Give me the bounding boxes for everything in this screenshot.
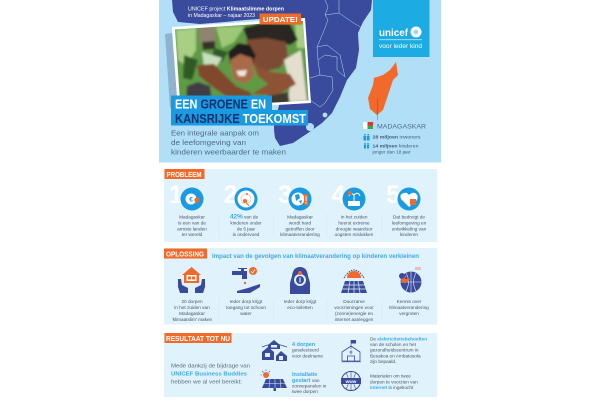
children stat (364, 143, 419, 154)
intro text (171, 364, 250, 386)
problem 2 (224, 181, 262, 237)
solution 2: clean water (226, 267, 266, 316)
problem 5 (386, 181, 427, 237)
solution 4: solar and internet: Duurzame (343, 299, 365, 304)
solution 5: climate knowledge (389, 267, 429, 316)
solution 1: climate-smart villages (172, 267, 213, 322)
solution 2: clean water: water (240, 311, 252, 316)
solution 3: eco toilets (284, 267, 317, 310)
problem 1: € (189, 196, 193, 204)
heading: resultaat: RESULTAAT TOT NU (166, 336, 230, 343)
population stat: 28 miljoen inwoners (372, 135, 420, 140)
panel: oplossing (164, 248, 437, 324)
problem 1 (169, 181, 207, 237)
result: electricity needs: Besakoa en Ambatosola (370, 353, 421, 358)
problem 3: wordt hard (289, 220, 311, 226)
flag of Madagascar (363, 122, 373, 129)
problem 1: armste landen (177, 226, 207, 232)
problem 4: In het zuiden (341, 214, 368, 220)
problem 2: kinderen onder (230, 220, 262, 226)
result: electricity needs: De elektriciteitsbehoeften (370, 337, 427, 342)
problem 3: klimaatverandering (280, 232, 320, 237)
unicef logo: unicef (379, 27, 408, 39)
problem 5: Dat bedreigt de (393, 214, 425, 220)
heading: probleem (164, 169, 204, 179)
subtitle: de leefomgeving van (171, 138, 246, 147)
main title: KANSRIJKE TOEKOMST (175, 111, 306, 126)
heading: oplossing: OPLOSSING (166, 252, 204, 258)
solution 1: climate-smart villages: Madagaskar (179, 311, 205, 316)
main title (171, 96, 308, 126)
solution 4: solar and internet: internet aanleggen (335, 317, 374, 322)
result: internet icon: www (345, 379, 357, 384)
result: electricity needs: van de scholen en het (370, 342, 417, 347)
heading: oplossing (164, 248, 207, 258)
solution 1: climate-smart villages: 'klimaatslim' maken (172, 317, 213, 322)
map of Madagascar (368, 62, 398, 115)
solution 5: climate knowledge: klimaatverandering (389, 305, 429, 310)
problem 2: 2 (224, 181, 237, 209)
subheading: Impact van de gevolgen van klimaatverandering op kinderen verkleinen (212, 253, 419, 260)
intro text: Mede dankzij de bijdrage van (171, 364, 250, 370)
problem 2: de 5 jaar (237, 226, 256, 232)
solution 2: clean water: Ieder dorp krijgt (230, 299, 263, 304)
solution 5: climate knowledge: vergroten (399, 311, 419, 316)
problem 5: leefomgeving en (392, 220, 427, 226)
problem 5: 5 (386, 181, 400, 209)
project title: in Madagaskar – najaar 2023 (188, 13, 255, 19)
problem 2: 42% (230, 214, 243, 220)
result: 4 villages: voor deelname (292, 354, 323, 358)
project title: UNICEF project Klimaatslimme dorpen (188, 6, 284, 12)
solution 3: eco toilets: eco-toiletten (287, 305, 313, 310)
solution 4: solar and internet: (zonne)energie en (335, 311, 373, 316)
problem 4: heerst extreme (338, 220, 370, 226)
problem 3 (278, 181, 320, 237)
solution 5: climate knowledge: Kennis over (397, 299, 422, 304)
result: school icon (342, 340, 361, 362)
result: solar installation (292, 372, 327, 394)
subtitle: Een integrale aanpak om (171, 128, 259, 138)
result: 4 villages: 4 dorpen (292, 342, 316, 348)
photo of children at water tap (172, 18, 311, 106)
problem 4: droogte waardoor (336, 226, 373, 232)
update badge: UPDATE! (263, 15, 298, 24)
solution 4: solar and internet: voorzieningen voor (334, 305, 374, 310)
result: 4 villages: geselecteerd (292, 348, 319, 352)
subtitle (171, 128, 286, 156)
heading: resultaat (164, 333, 232, 343)
solution 4: solar and internet (334, 270, 374, 322)
result: internet icon (341, 372, 361, 390)
result: electricity needs: zijn bepaald. (370, 359, 396, 364)
problem 1: 1 (169, 181, 183, 209)
problem 2: is ondervoed (233, 232, 260, 237)
problem 3: getroffen door (285, 226, 315, 232)
result: solar installation: gestart van (292, 378, 320, 384)
result: internet materials: Materialen om twee (370, 373, 411, 378)
heading: probleem: PROBLEEM (166, 172, 202, 179)
intro text: hebben we al veel bereikt: (171, 380, 242, 386)
problem 3: Madagaskar (287, 214, 313, 220)
subtitle: kinderen weerbaarder te maken (171, 148, 286, 156)
unicef logo (373, 0, 430, 57)
problem 5: ontwikkeling van (392, 226, 427, 232)
intro text: UNICEF Business Buddies (171, 372, 247, 378)
problem 1: is een van de (178, 220, 206, 226)
population stat (364, 134, 420, 140)
children stat: 14 miljoen kinderen (372, 144, 419, 148)
map of southern Africa (172, 0, 372, 146)
problem 4: 4 (332, 181, 346, 209)
solution 3: eco toilets: Ieder dorp krijgt (284, 299, 317, 304)
panel: probleem (164, 169, 437, 242)
photo shadow (165, 33, 178, 108)
solution 1: climate-smart villages: in het zuiden van (174, 305, 210, 310)
solution 1: climate-smart villages: 20 dorpen (181, 299, 203, 304)
map borders (306, 0, 362, 131)
result: solar installation: twee dorpen (292, 389, 318, 394)
panel: resultaat tot nu (164, 333, 437, 397)
problem 5: kinderen (400, 232, 418, 237)
result: internet materials: dorpen te voorzien van (370, 379, 418, 384)
unicef logo: voor ieder kind (379, 43, 423, 50)
result: 4 villages (292, 342, 323, 358)
hero panel (159, 0, 441, 162)
problem 4 (332, 181, 374, 237)
problem 1: ter wereld (182, 232, 203, 237)
problem 1: Madagaskar (179, 214, 205, 220)
result: solar panel icon (260, 370, 287, 391)
result: solar installation: zonnepanelen in (292, 384, 327, 388)
main title: EEN GROENE EN (175, 96, 266, 112)
country name: MADAGASKAR (377, 124, 426, 130)
result: internet materials: internet is ingekocht (370, 385, 413, 390)
problem 2: van de (244, 214, 258, 220)
result: electricity needs: gezondheidscentrum in (370, 348, 419, 353)
result: villages icon (262, 340, 287, 361)
project title (188, 6, 284, 19)
solution 2: clean water: toegang tot schoon (226, 305, 266, 310)
children stat: jonger dan 18 jaar (371, 150, 411, 154)
problem 3: 3 (278, 181, 292, 209)
problem 4: oogsten mislukken (335, 232, 374, 237)
update badge (260, 14, 301, 24)
result: solar installation: Installatie (292, 372, 317, 378)
